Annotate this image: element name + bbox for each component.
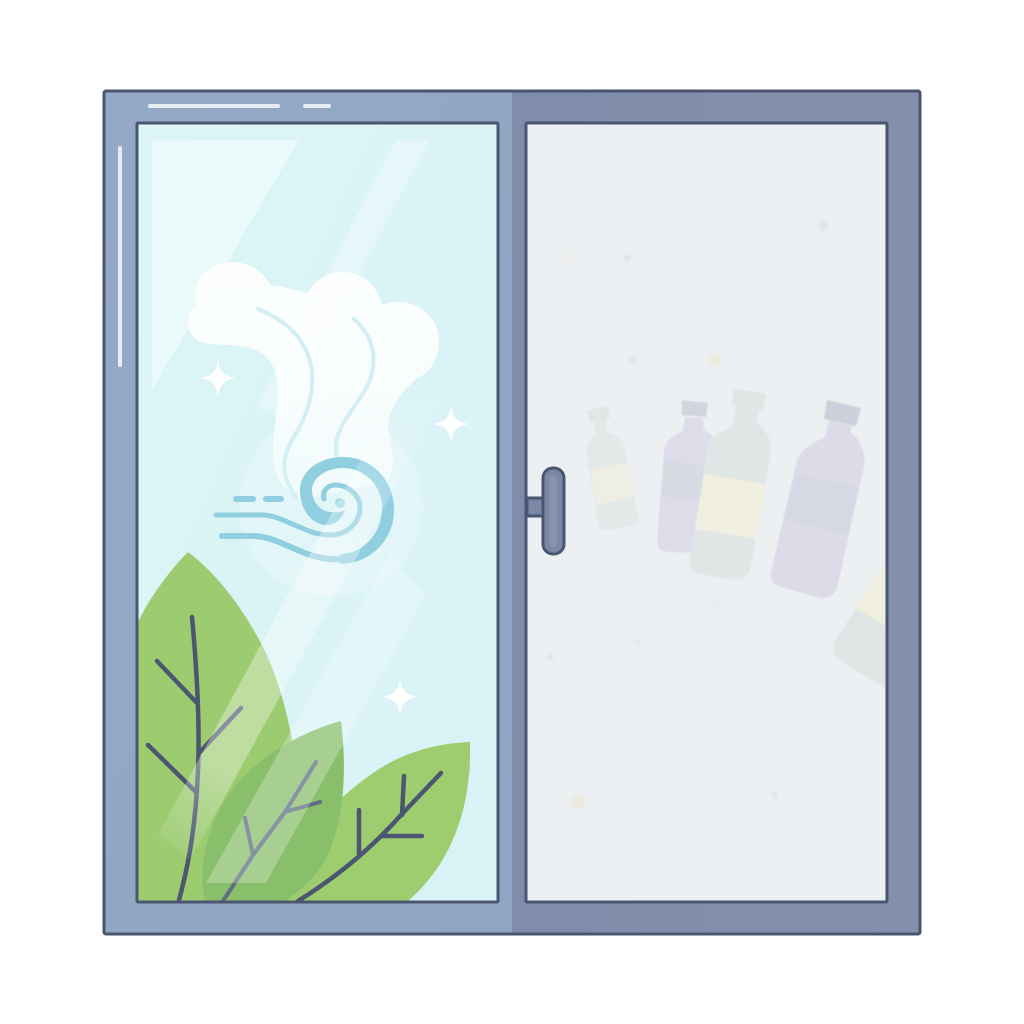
- panel: clear glass: [138, 124, 497, 901]
- sparkles: [200, 360, 469, 715]
- frame highlights: [120, 106, 329, 365]
- bottle 2: [657, 400, 716, 553]
- bottle 3: [689, 388, 771, 580]
- blurred bottles: [586, 388, 888, 690]
- veins dark: [148, 617, 441, 901]
- icon: wind swirl: [216, 457, 394, 564]
- reflection band A: [158, 460, 392, 860]
- reflection band B: [206, 553, 425, 883]
- glass reflections upper: [152, 140, 429, 420]
- veins mid leaf: [223, 762, 320, 901]
- bottle 5: [833, 558, 888, 690]
- bottle 4: [770, 400, 864, 598]
- leaf middle: [202, 721, 344, 901]
- window frame: [104, 91, 920, 934]
- leaves: [138, 552, 470, 901]
- leaf right: [286, 742, 470, 900]
- cloud of fresh air: [188, 262, 439, 500]
- window handle: [527, 468, 564, 554]
- leaf left: [138, 552, 295, 901]
- bottle 1: [586, 406, 638, 530]
- glow circle: [239, 413, 423, 597]
- dust specks: [547, 221, 828, 809]
- glass outlines: [137, 123, 887, 902]
- illustration: window: [102, 90, 922, 936]
- panel: frosted glass: [527, 124, 888, 901]
